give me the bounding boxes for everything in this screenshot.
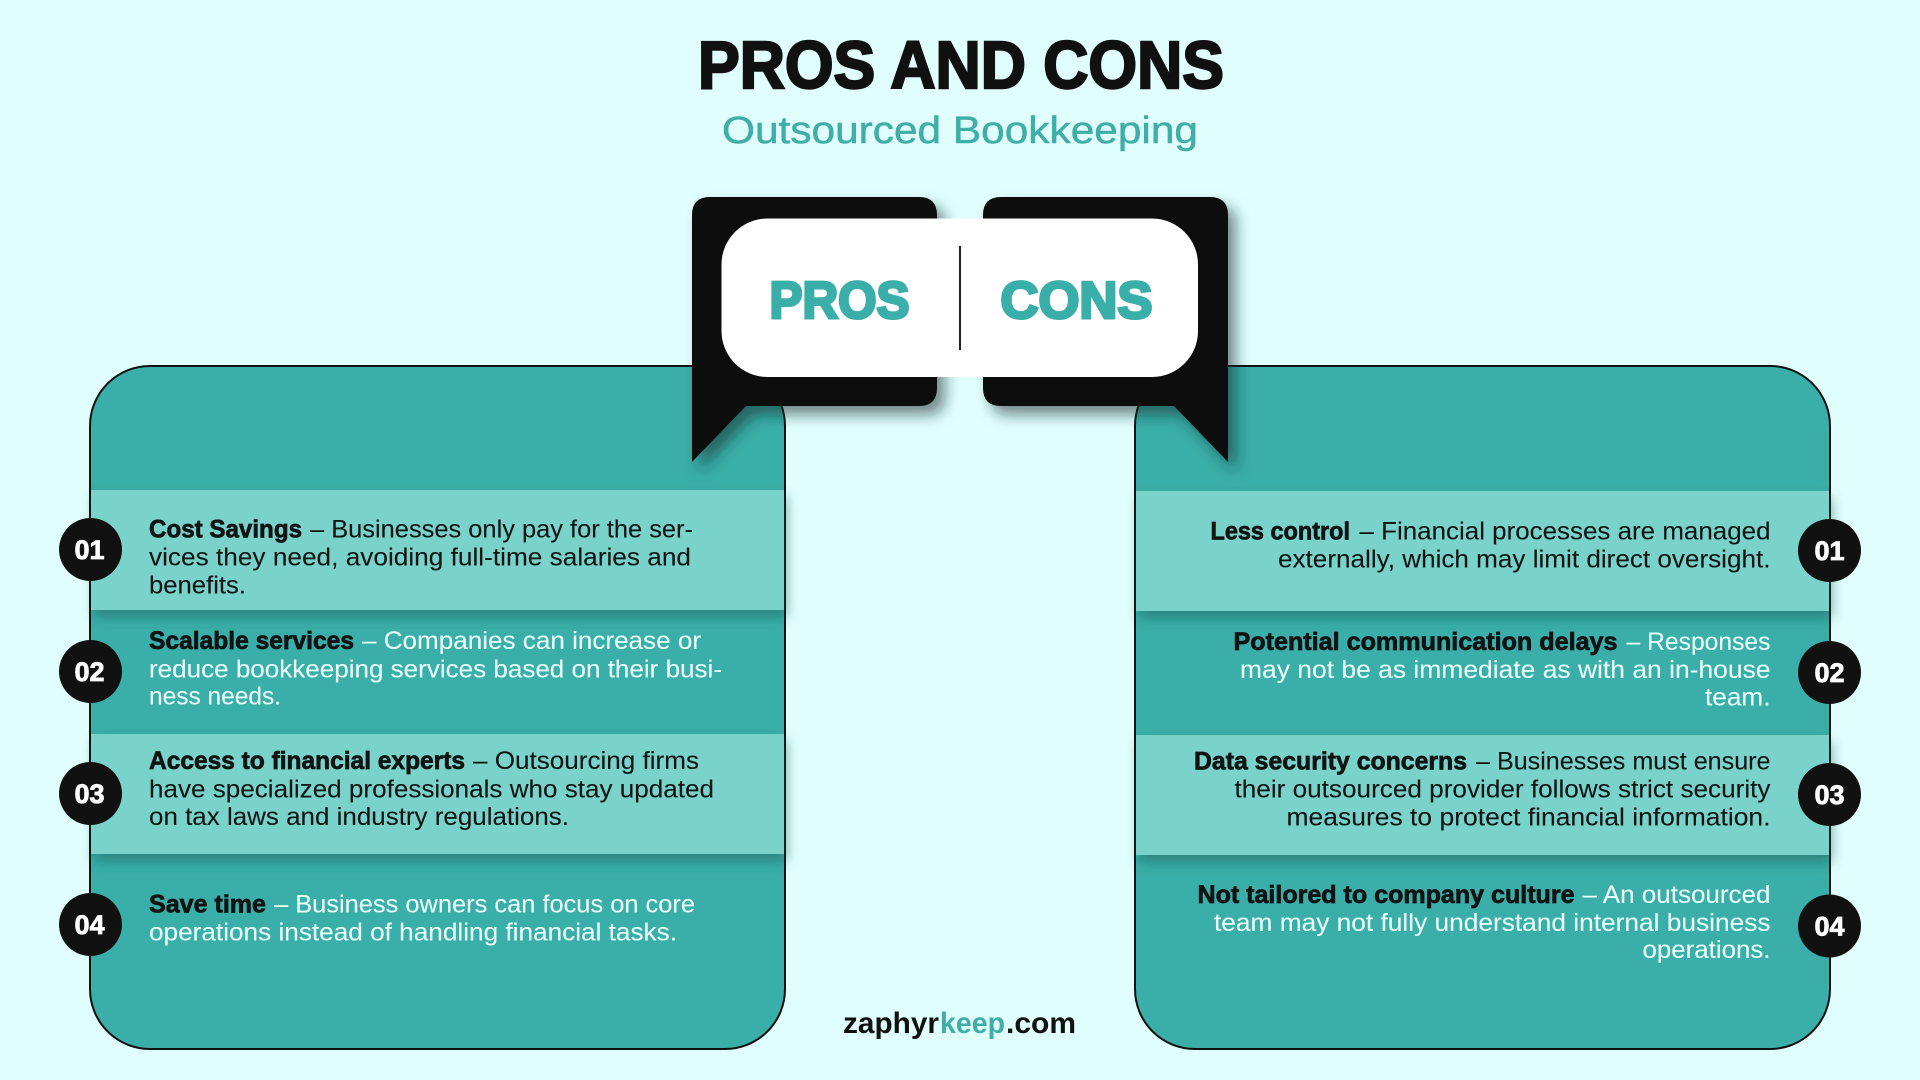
- pros item 1: [149, 516, 693, 600]
- cons item 1: Less control: [1210, 518, 1350, 546]
- pros number 01: [59, 518, 122, 581]
- cons number 03: [1798, 763, 1861, 826]
- cons item 3: their outsourced provider follows strict security: [1234, 776, 1771, 804]
- subtitle: Outsourced Bookkeeping: [722, 110, 1198, 152]
- cons item 1: – Financial processes are managed: [1360, 518, 1770, 546]
- pros item 3: – Outsourcing firms: [473, 747, 699, 775]
- title: PROS AND CONS: [698, 28, 1224, 103]
- pros number 03: [59, 762, 122, 825]
- pros number 02: [59, 640, 122, 703]
- pros item 4: operations instead of handling financial tasks.: [149, 918, 677, 946]
- pros item 3: on tax laws and industry regulations.: [149, 803, 569, 831]
- pros item 4: – Business owners can focus on core: [274, 890, 695, 918]
- pros label: PROS: [770, 272, 910, 330]
- footer brand: [843, 1007, 1076, 1040]
- cons item 3: Data security concerns: [1194, 748, 1467, 776]
- cons number 02: [1798, 641, 1861, 704]
- pros item 4: Save time: [149, 890, 266, 918]
- footer brand: keep: [940, 1007, 1005, 1040]
- white label pill: [722, 218, 1198, 377]
- centre divider: [959, 246, 961, 350]
- cons item 1: [1210, 518, 1770, 574]
- pros item 2: [149, 627, 722, 710]
- pros number 04: [59, 893, 122, 956]
- cons item 3: measures to protect financial information.: [1286, 804, 1770, 832]
- cons number 03: 03: [1814, 780, 1845, 810]
- cons item 3: – Businesses must ensure: [1476, 748, 1770, 776]
- pros item 4: [149, 890, 695, 946]
- pros number 01: 01: [74, 535, 105, 565]
- cons number 04: [1798, 894, 1861, 958]
- cons item 2: team.: [1705, 684, 1770, 712]
- cons number 01: 01: [1814, 536, 1845, 566]
- cons item 2: – Responses: [1626, 628, 1770, 656]
- pros item 1: vices they need, avoiding full-time salaries and: [149, 544, 691, 572]
- pros item 1: – Businesses only pay for the ser-: [310, 516, 693, 544]
- pros light bands: [91, 490, 784, 854]
- cons item 4: team may not fully understand internal business: [1214, 909, 1770, 937]
- footer brand: zaphyr: [843, 1007, 939, 1040]
- speech bubble: cons: [983, 197, 1228, 462]
- pros number 03: 03: [74, 779, 105, 809]
- pros item 1: benefits.: [149, 572, 246, 600]
- pros item 3: have specialized professionals who stay updated: [149, 776, 714, 804]
- cons item 2: [1234, 628, 1770, 712]
- cons item 4: operations.: [1642, 936, 1770, 964]
- pros item 3: Access to financial experts: [149, 747, 465, 775]
- cons item 4: – An outsourced: [1582, 881, 1770, 909]
- cons number 04: 04: [1814, 912, 1845, 942]
- cons item 3: [1194, 748, 1771, 832]
- pros item 2: reduce bookkeeping services based on their busi-: [149, 656, 722, 684]
- pros item 2: Scalable services: [149, 627, 354, 655]
- cons panel background: [1135, 366, 1830, 1049]
- pros number 04: 04: [74, 910, 105, 940]
- footer brand: .com: [1006, 1007, 1076, 1040]
- pros item 2: ness needs.: [149, 682, 281, 710]
- pros item 3: [149, 747, 714, 831]
- speech bubble: pros: [692, 197, 937, 462]
- pros number 02: 02: [74, 657, 105, 687]
- cons light bands: [1136, 491, 1829, 855]
- panel: cons: [1135, 366, 1861, 1049]
- cons item 1: externally, which may limit direct oversight.: [1278, 546, 1770, 574]
- cons item 4: Not tailored to company culture: [1198, 881, 1575, 909]
- pros item 2: – Companies can increase or: [362, 627, 701, 655]
- cons number 02: 02: [1814, 658, 1845, 688]
- cons label: CONS: [1000, 272, 1152, 330]
- cons item 2: may not be as immediate as with an in-house: [1240, 656, 1770, 684]
- panel: pros: [59, 366, 785, 1049]
- cons item 2: Potential communication delays: [1234, 628, 1618, 656]
- cons number 01: [1798, 519, 1861, 582]
- pros item 1: Cost Savings: [149, 516, 302, 544]
- pros panel background: [90, 366, 785, 1049]
- cons item 4: [1198, 881, 1770, 964]
